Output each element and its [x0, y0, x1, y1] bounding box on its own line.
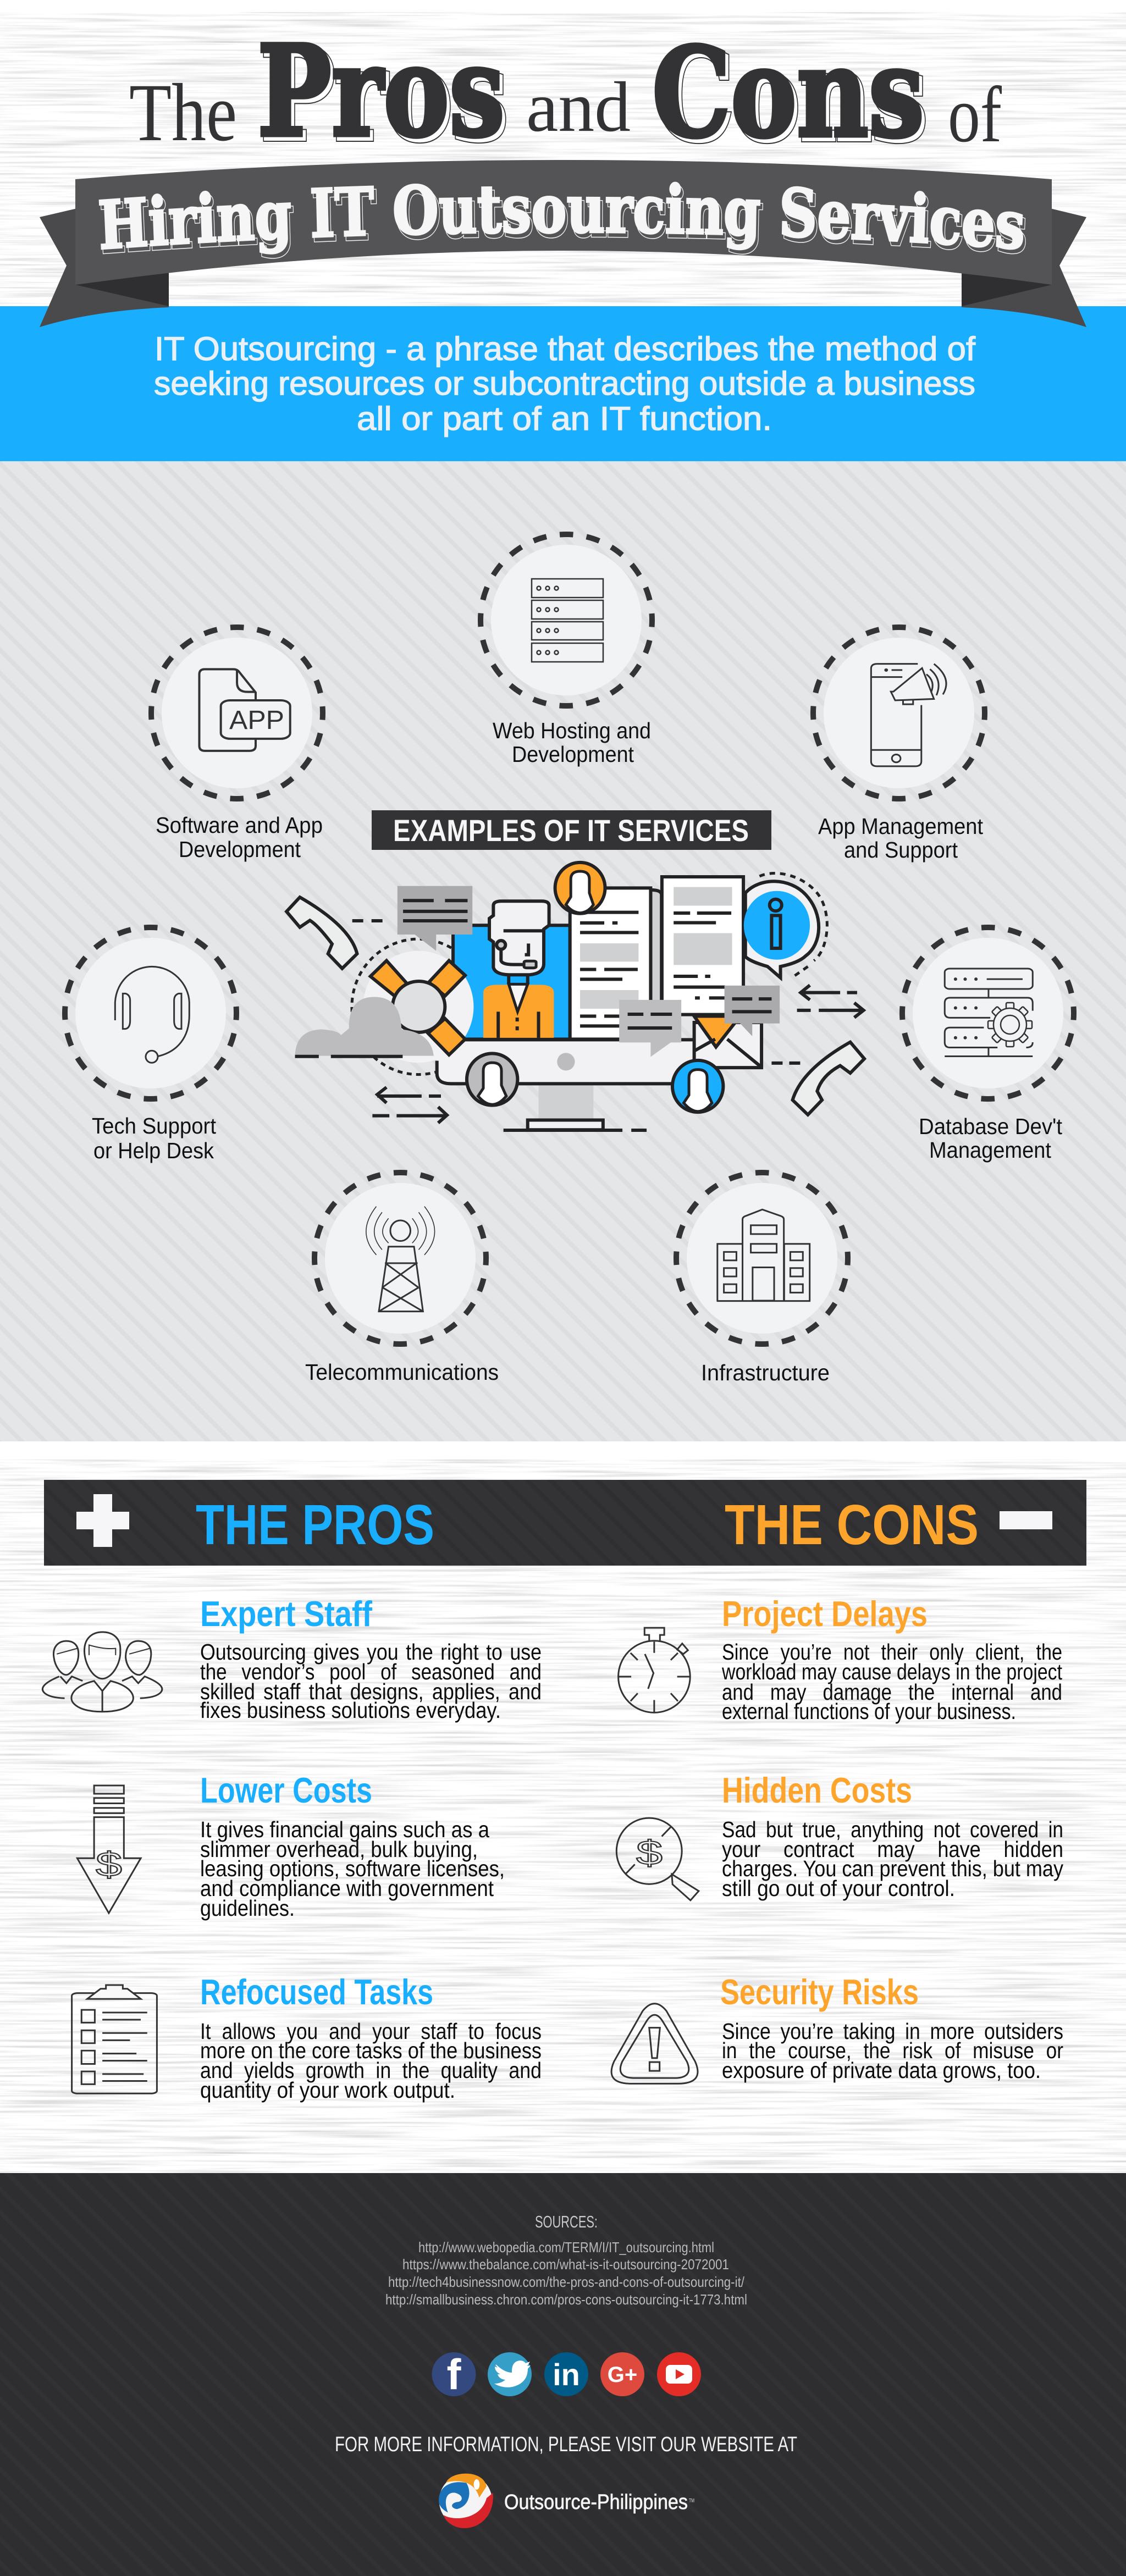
sources: http://smallbusiness.chron.com/pros-cons-outsourcing-it-1773.html [385, 2291, 747, 2308]
user avatars [467, 863, 723, 1112]
con: hidden costs: $ [636, 1834, 663, 1872]
social icons: in [553, 2357, 580, 2392]
document: scroll [570, 888, 661, 1039]
ribbon banner: Hiring IT Outsourcing Services [99, 181, 1023, 255]
pro: refocused tasks: Refocused Tasks [200, 1972, 433, 2012]
panel: blue definition band: seeking resources or subcontracting outside a business [154, 365, 975, 402]
cloud [295, 997, 434, 1057]
central illustration [286, 863, 864, 1130]
pro: lower costs: slimmer overhead, bulk buying, [200, 1837, 478, 1862]
pro: refocused tasks: It allows you and your staff to focus [200, 2019, 542, 2044]
con: project delays: Since you’re not their only client, the [722, 1639, 1062, 1665]
pro: expert staff: Outsourcing gives you the right to use [200, 1639, 542, 1665]
icon: envelope [694, 1016, 761, 1068]
sources [385, 2212, 747, 2308]
logo: outsource philippines [439, 2474, 694, 2528]
pro: lower costs: Lower Costs [200, 1770, 372, 1810]
service: infrastructure: Infrastructure [701, 1360, 830, 1385]
service: database development management [896, 921, 1080, 1163]
title: the pros and cons of: of [948, 71, 1002, 159]
service: web hosting and development: Web Hosting and [493, 718, 651, 743]
panel: footer [0, 2173, 1126, 2576]
service: software and app development: Software and App [156, 812, 323, 838]
con: hidden costs: still go out of your control. [722, 1876, 955, 1901]
con: project delays: Project Delays [722, 1594, 928, 1634]
document: page [662, 877, 743, 1015]
ribbon banner: Hiring IT Outsourcing Services [101, 187, 1025, 258]
icon: left phone [286, 897, 357, 969]
service: software and app development: Development [179, 837, 301, 862]
header bar: pros and cons [44, 1480, 1086, 1566]
panel: header [0, 12, 1126, 461]
pro: refocused tasks [72, 1972, 542, 2103]
con: hidden costs: your contract may have hidden [722, 1837, 1063, 1862]
con: project delays: and may damage the internal and [722, 1679, 1062, 1705]
con: security risks: in the course, the risk of misuse or [722, 2038, 1063, 2063]
con: security risks: exposure of private data grows, too. [722, 2058, 1041, 2083]
pro: lower costs: It gives financial gains such as a [200, 1817, 489, 1842]
banner: examples of it services: EXAMPLES OF IT SERVICES [393, 813, 749, 848]
title: the pros and cons of: Pros [261, 21, 508, 169]
support agent [483, 901, 554, 1038]
service: software and app development [145, 621, 329, 862]
icon: right phone [793, 1042, 864, 1115]
pro: lower costs: $ [96, 1846, 122, 1884]
pro: expert staff: skilled staff that designs, applies, and [200, 1679, 542, 1704]
sources: https://www.thebalance.com/what-is-it-outsourcing-2072001 [402, 2256, 729, 2273]
sources: SOURCES: [535, 2212, 598, 2231]
speech bubbles [398, 886, 780, 1057]
service: app management and support: and Support [844, 837, 958, 863]
panel: blue definition band [0, 306, 1126, 461]
con: project delays: workload may cause delays in the project [721, 1659, 1062, 1684]
title: the pros and cons of: Pros [257, 18, 505, 165]
service: software and app development: APP [229, 706, 284, 735]
pro: refocused tasks: more on the core tasks of the business [200, 2038, 542, 2063]
service: tech support or help desk [58, 921, 243, 1163]
service: infrastructure [670, 1166, 854, 1385]
dashed ring around lifebuoy [352, 939, 485, 1075]
title: the pros and cons of: Cons [655, 24, 928, 169]
panel: blue definition band: all or part of an IT function. [357, 400, 772, 437]
pro: expert staff [42, 1594, 542, 1723]
title: the pros and cons of: Cons [652, 20, 924, 165]
con: project delays [619, 1594, 1062, 1724]
con: security risks [611, 1972, 1063, 2083]
pro: lower costs: and compliance with government [200, 1876, 494, 1901]
arrows right [797, 985, 864, 1018]
con: hidden costs: Sad but true, anything not covered in [722, 1817, 1063, 1842]
title: the pros and cons of: The [129, 67, 237, 158]
logo: outsource philippines: TM [689, 2498, 694, 2504]
service: database development management: Database Dev't [919, 1114, 1063, 1139]
title: the pros and cons of [129, 18, 1002, 169]
social icons: f [447, 2350, 462, 2398]
pro: lower costs [77, 1770, 505, 1921]
title: the pros and cons of: Pros [261, 21, 508, 169]
con: hidden costs: charges. You can prevent this, but may [722, 1856, 1063, 1881]
monitor [437, 925, 695, 1130]
con: project delays: external functions of your business. [722, 1699, 1016, 1724]
con: hidden costs: Hidden Costs [722, 1770, 912, 1810]
pro: refocused tasks: quantity of your work output. [200, 2077, 455, 2103]
pro: expert staff: Expert Staff [200, 1594, 372, 1634]
ribbon banner [40, 160, 1086, 327]
service: tech support or help desk: or Help Desk [93, 1138, 214, 1163]
logo: outsource philippines: Outsource-Philippines [504, 2491, 688, 2514]
sources: http://tech4businessnow.com/the-pros-and-cons-of-outsourcing-it/ [388, 2274, 745, 2290]
service: app management and support [807, 621, 991, 863]
arrows left [372, 1087, 447, 1123]
social icons: G+ [608, 2363, 637, 2387]
website call to action: FOR MORE INFORMATION, PLEASE VISIT OUR WEBSITE AT [335, 2433, 797, 2456]
service: telecommunications: Telecommunications [305, 1359, 499, 1385]
title: the pros and cons of: Cons [655, 24, 928, 169]
con: security risks: Since you’re taking in more outsiders [722, 2019, 1063, 2044]
sources: http://www.webopedia.com/TERM/I/IT_outsourcing.html [418, 2239, 714, 2256]
header bar: pros and cons: THE PROS [196, 1493, 434, 1556]
lifebuoy [363, 951, 473, 1063]
service: telecommunications [305, 1166, 499, 1385]
service: web hosting and development [474, 528, 659, 767]
con: hidden costs [616, 1770, 1063, 1901]
panel: examples of IT services [0, 461, 1126, 1441]
service: tech support or help desk: Tech Support [92, 1113, 217, 1138]
title: the pros and cons of: and [526, 68, 631, 147]
icon: info bubble [744, 874, 827, 978]
pro: expert staff: the vendor’s pool of seasoned and [200, 1659, 542, 1684]
service: app management and support: App Management [818, 814, 984, 839]
header bar: pros and cons: THE CONS [725, 1493, 979, 1556]
panel: blue definition band: IT Outsourcing - a phrase that describes the method of [154, 330, 975, 367]
pro: lower costs: leasing options, software licenses, [200, 1856, 505, 1881]
pro: expert staff: fixes business solutions everyday. [200, 1698, 501, 1723]
ribbon banner: Hiring IT Outsourcing Services [101, 186, 1026, 259]
pro: lower costs: guidelines. [200, 1895, 295, 1921]
pro: refocused tasks: and yields growth in the quality and [200, 2058, 542, 2083]
service: database development management: Management [929, 1137, 1052, 1163]
con: security risks: Security Risks [720, 1972, 919, 2012]
panel: pros and cons [0, 1460, 1126, 2173]
social icons [432, 2350, 701, 2398]
service: web hosting and development: Development [512, 742, 634, 767]
